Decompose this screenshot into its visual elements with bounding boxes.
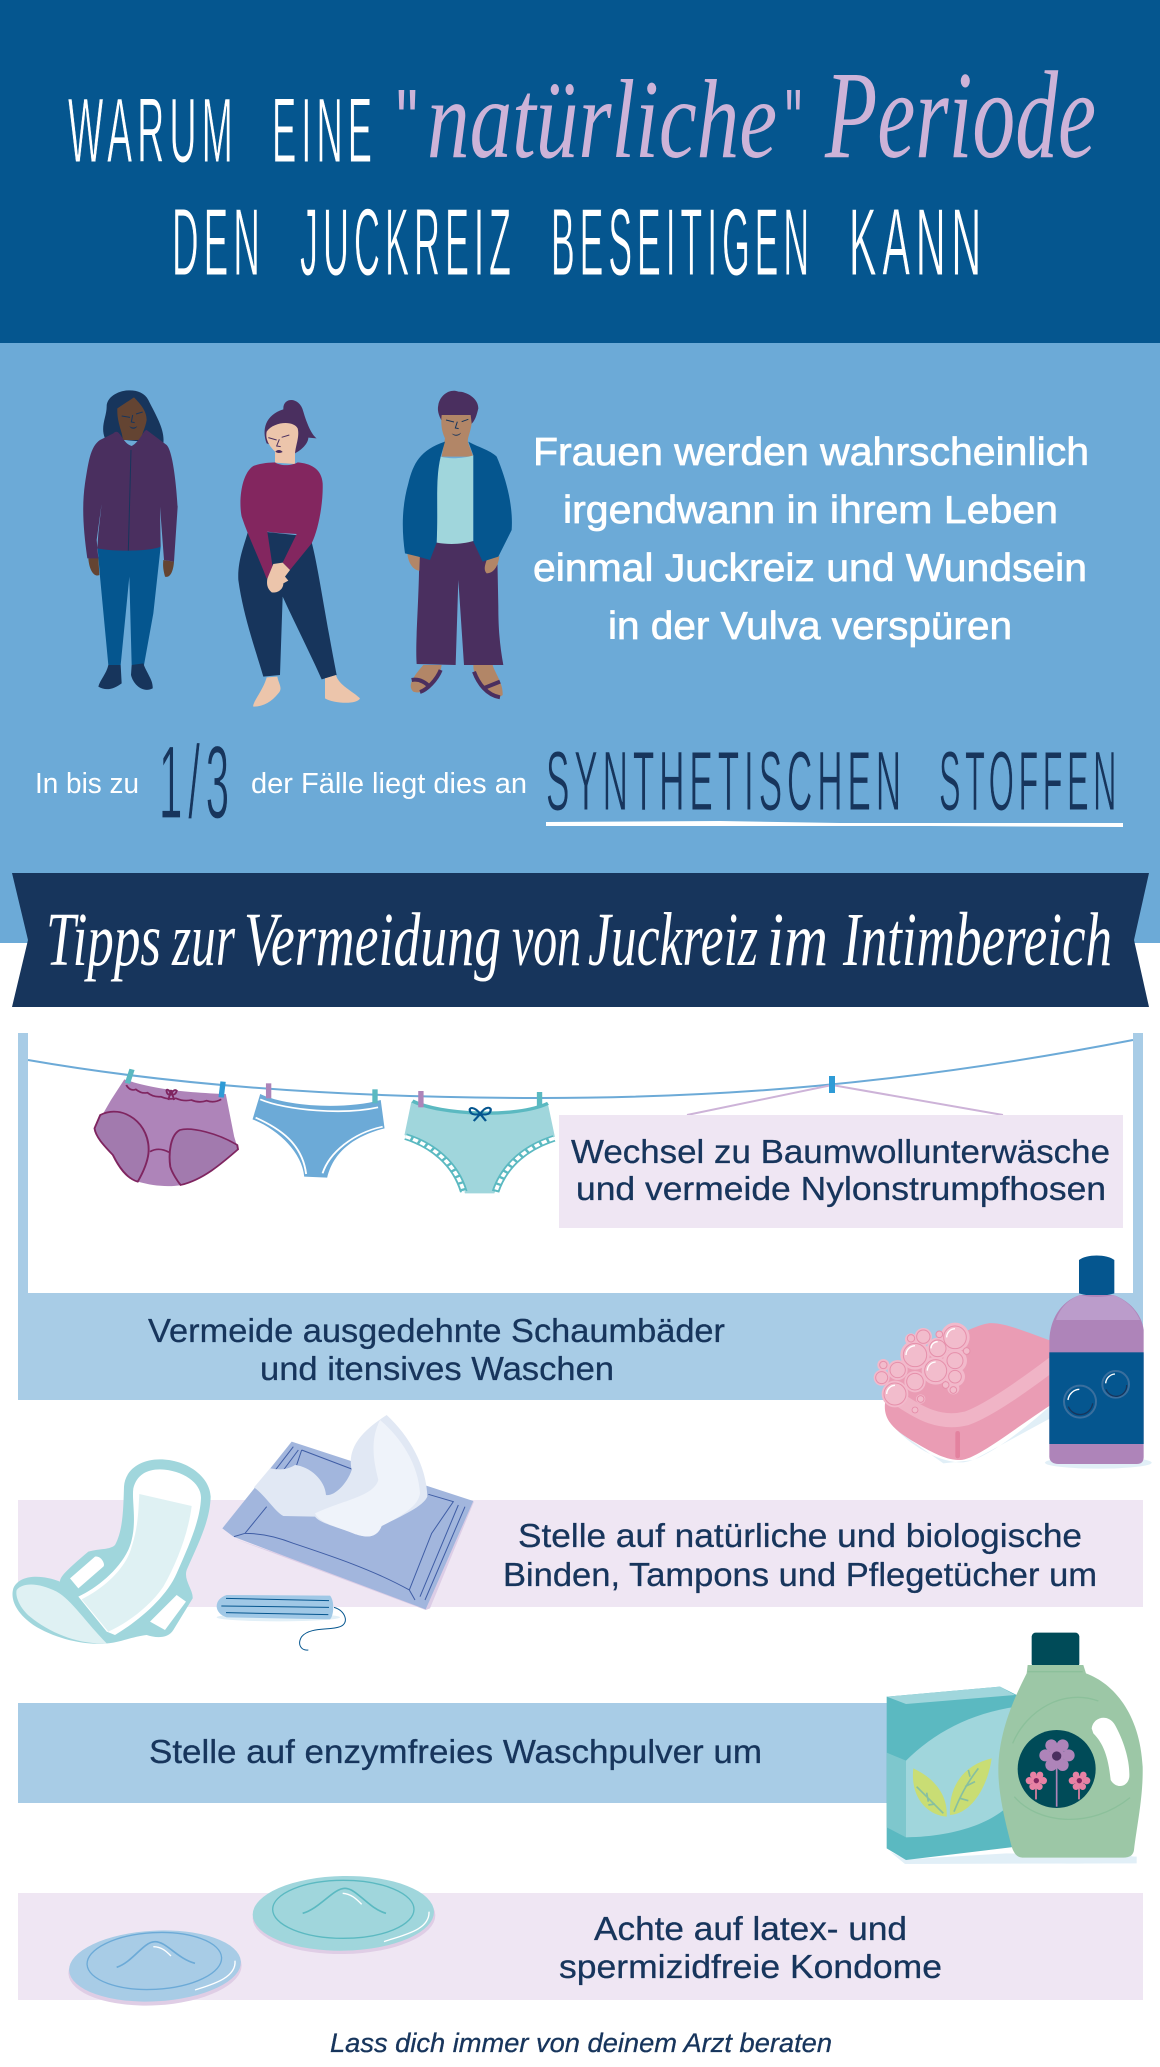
banner: tips heading [12, 873, 1149, 1007]
callout: cotton underwear: Wechsel zu Baumwollunterwäsche [571, 1133, 1110, 1170]
statistic line: der Fälle liegt dies an [251, 768, 527, 800]
icon: blue briefs [253, 1083, 385, 1178]
panel: header title: EINE [272, 80, 377, 182]
figure: woman holding crotch [238, 400, 360, 707]
footer note: Lass dich immer von deinem Arzt beraten [330, 2028, 832, 2058]
icon: detergent jug [998, 1633, 1143, 1864]
panel: header title [0, 0, 1160, 343]
panel: intro [0, 343, 1160, 943]
panel: natural hygiene products tip [12, 1415, 1143, 1650]
icon: teal condom [252, 1874, 436, 1956]
panel: natural hygiene products tip: Binden, Tampons und Pflegetücher um [503, 1556, 1097, 1593]
panel: natural hygiene products tip: Stelle auf natürliche und biologische [518, 1517, 1082, 1554]
figures group [83, 390, 512, 707]
banner: tips heading: Tipps [46, 898, 161, 982]
callout: cotton underwear: und vermeide Nylonstrumpfhosen [576, 1170, 1106, 1207]
panel: clothesline tip [18, 1033, 1143, 1303]
icon: washing powder box [887, 1687, 1137, 1864]
icon: soap [874, 1323, 1053, 1463]
title script accent: " [785, 72, 802, 172]
callout: cotton underwear [559, 1115, 1123, 1228]
title script accent [396, 47, 1096, 185]
banner: tips heading: im [767, 898, 828, 982]
statistic line [35, 725, 1123, 841]
panel: foam bath tip: und itensives Waschen [260, 1350, 614, 1387]
intro statement [533, 431, 1089, 648]
icon: purple briefs [95, 1069, 238, 1186]
intro statement: irgendwann in ihrem Leben [563, 489, 1058, 532]
panel: header title: KANN [849, 189, 987, 296]
underwear on line [95, 1069, 555, 1193]
banner: tips heading: Vermeidung [244, 898, 501, 982]
title line 2: DEN [172, 189, 265, 296]
panel: foam bath tip: Vermeide ausgedehnte Schaumbäder [148, 1312, 725, 1349]
icon: shower gel bottle [1045, 1255, 1152, 1469]
intro statement: einmal Juckreiz und Wundsein [533, 547, 1087, 590]
intro statement: in der Vulva verspüren [608, 605, 1012, 648]
statistic line: 1/3 [159, 725, 235, 841]
banner: tips heading: zur [171, 898, 235, 982]
statistic line: In bis zu [35, 768, 139, 800]
panel: detergent tip: Stelle auf enzymfreies Waschpulver um [149, 1733, 762, 1770]
panel: foam bath tip [18, 1255, 1152, 1469]
panel: detergent tip [18, 1633, 1143, 1864]
banner: tips heading: Juckreiz [588, 898, 758, 982]
icon: blue condom [67, 1926, 243, 2010]
title script accent: " [396, 72, 418, 172]
icon: sanitary pad [12, 1459, 211, 1644]
title script accent: natürliche [427, 58, 777, 182]
title line 2: JUCKREIZ [300, 189, 516, 296]
icon: wipes package [222, 1415, 474, 1610]
icon: teal briefs [404, 1091, 555, 1193]
panel: condoms tip [18, 1874, 1143, 2010]
banner: tips heading: von [512, 898, 581, 982]
icon: tampon [217, 1595, 345, 1650]
title line 1: WARUM [68, 80, 238, 182]
figure: woman with long hair [83, 390, 178, 690]
panel: condoms tip: spermizidfreie Kondome [559, 1948, 942, 1985]
intro statement: Frauen werden wahrscheinlich [533, 431, 1089, 474]
figure: person in blue cardigan [403, 391, 512, 697]
panel: condoms tip: Achte auf latex- und [594, 1910, 907, 1947]
